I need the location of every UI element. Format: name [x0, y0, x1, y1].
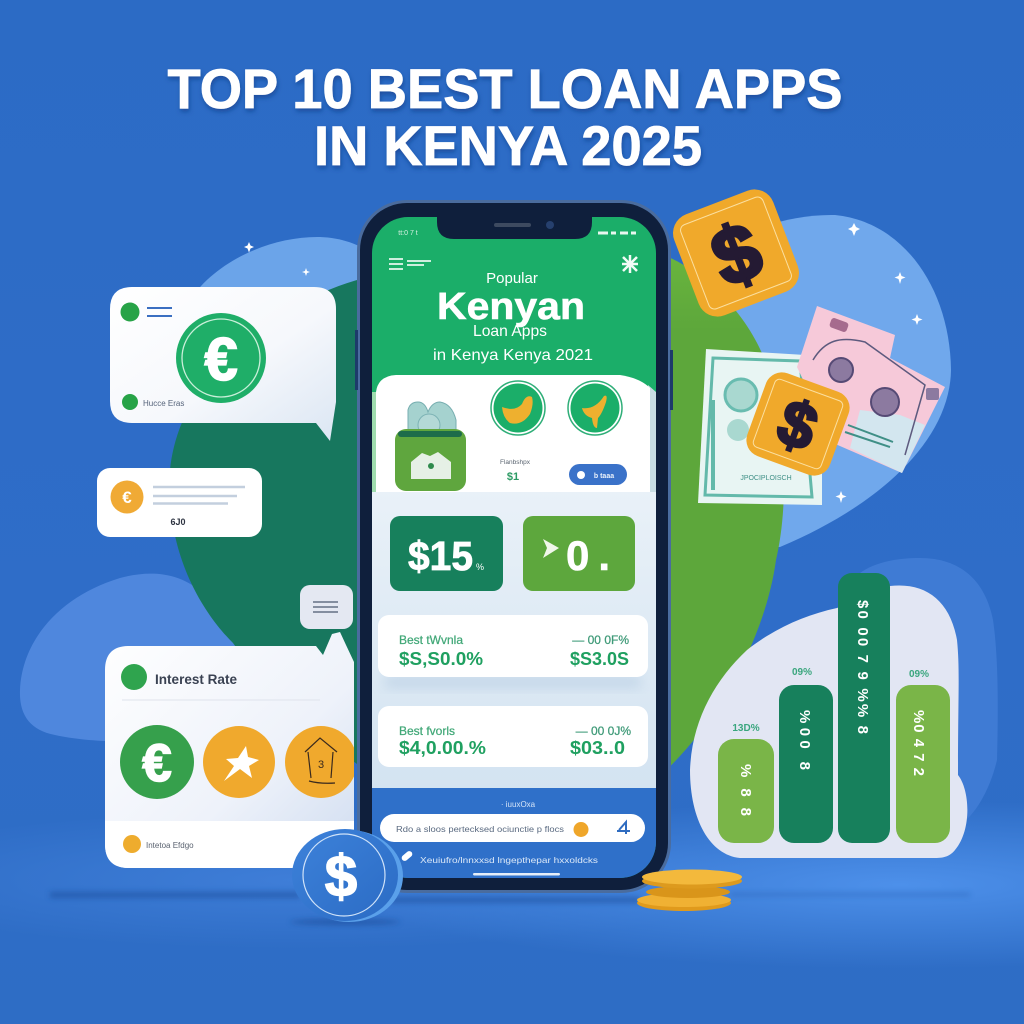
label: small stat [500, 460, 530, 482]
row card two [378, 706, 648, 767]
bar 1 [718, 723, 774, 843]
icon: blue dollar coin [292, 829, 403, 922]
bar 4: 09% [909, 669, 929, 680]
row card shadow one [385, 676, 641, 688]
value: 6J0 [170, 517, 186, 527]
title: IN KENYA 2025 [314, 114, 702, 177]
panel: chart backdrop blob [690, 585, 967, 858]
screen heading: Loan Apps [473, 323, 547, 340]
row card one: $S3.0S [570, 648, 629, 669]
icon: green banknote [698, 349, 822, 505]
row card one: $S,S0.0% [399, 648, 483, 669]
bubble: euro card [110, 287, 336, 441]
icon: large dollar tile: $ [700, 205, 773, 304]
caption: Hucce Eras [143, 399, 184, 408]
stat box: >0. [523, 516, 635, 591]
icon: large dollar tile [667, 184, 805, 322]
icon: orange coin: € [122, 488, 132, 507]
button [569, 464, 627, 485]
circle: green right half [650, 250, 784, 785]
bar 4: %0 4 7 2 [910, 710, 927, 776]
row card two: $03..0 [570, 737, 625, 758]
stat box: $15 [390, 516, 503, 591]
footer note [402, 851, 598, 864]
euro badge: € [142, 734, 172, 793]
label: small stat: $1 [507, 471, 519, 483]
icon: orange coin [110, 480, 144, 514]
icon: small dollar tile [742, 368, 854, 480]
bubble: small card [97, 468, 262, 537]
bottom bar caption: · iuuxOxa [501, 800, 536, 809]
blob: lower left blue [20, 574, 240, 741]
title [168, 57, 842, 177]
star badge [203, 726, 275, 798]
icon: small dollar tile: $ [769, 385, 827, 465]
icon: coin stack [637, 870, 742, 911]
home indicator [473, 873, 560, 876]
screen heading: Kenyan [437, 286, 585, 328]
search pill [380, 814, 645, 842]
icon: green dot [120, 302, 140, 322]
footer band: Intetoa Efdgo [146, 841, 194, 850]
stat box: $15: $15 [408, 533, 473, 579]
notch [437, 216, 592, 239]
floor [0, 800, 1024, 980]
row card two: $4,0.00.% [399, 737, 486, 758]
phone screen [372, 217, 656, 878]
stat box: >0.: 0. [566, 532, 619, 579]
bar 3 [838, 573, 890, 843]
bar 1: 13D% [732, 723, 760, 734]
search pill: Rdo a sloos pertecksed ociunctie p flocs [396, 824, 564, 834]
circle: dark green left half [170, 274, 380, 780]
panel: interest rate [105, 632, 357, 868]
icon: wallet with bills [395, 402, 466, 491]
row card two: — 00 0J% [576, 724, 631, 738]
house badge: 3 [318, 759, 324, 771]
icon: pink banknote [797, 306, 945, 473]
euro badge [120, 725, 194, 799]
blob: upper right light blue [660, 215, 951, 547]
icon: euro coin [176, 313, 266, 403]
bar 2: %00 8 [796, 710, 813, 770]
white app card [376, 375, 650, 492]
lines [147, 308, 172, 316]
phone [355, 200, 673, 893]
screen heading [433, 270, 593, 364]
row card one: Best tWvnla [399, 633, 463, 647]
header icon [121, 664, 147, 690]
house badge [285, 726, 357, 798]
speaker and camera [494, 221, 554, 229]
label: small stat: Flanbshpx [500, 459, 531, 466]
status time: tt:0 7 t [398, 230, 418, 237]
title: TOP 10 BEST LOAN APPS [168, 57, 842, 120]
bar 3: $0 00 7 9 %% 8 [854, 600, 871, 734]
icon: blue dollar coin: $ [325, 844, 357, 909]
blob: upper left light blue [190, 237, 400, 360]
icon: euro coin: € [204, 326, 238, 393]
row card one: — 00 0F% [572, 633, 629, 647]
bar 2 [779, 667, 833, 843]
footer band [105, 821, 354, 868]
footer note: Xeuiufro/lnnxxsd lngepthepar hxxoldcks [420, 855, 598, 865]
screen heading: Popular [486, 270, 538, 287]
icon: app badge two [568, 381, 622, 435]
status icons [598, 232, 636, 234]
row card one [378, 615, 648, 677]
screen heading: in Kenya Kenya 2021 [433, 347, 593, 364]
stat box: $15: % [476, 562, 484, 572]
button: b taaa [594, 473, 614, 480]
bar 2: 09% [792, 667, 812, 678]
caption [122, 394, 184, 410]
row card two: Best fvorls [399, 724, 455, 738]
lines [153, 487, 245, 504]
bubble: mini menu [300, 585, 353, 629]
bar 1: % 8 8 [737, 764, 754, 816]
bar 4 [896, 669, 950, 843]
sparkles [244, 223, 922, 503]
bar chart [718, 573, 950, 843]
floor shadow under coin [290, 919, 400, 925]
menu icon [389, 259, 431, 269]
blob: lower right blue [840, 558, 998, 825]
settings icon [622, 255, 638, 273]
icon: green banknote: JPOCIPLOISCH [740, 475, 792, 482]
header text: Interest Rate [155, 672, 237, 687]
icon: app badge one [491, 381, 545, 435]
